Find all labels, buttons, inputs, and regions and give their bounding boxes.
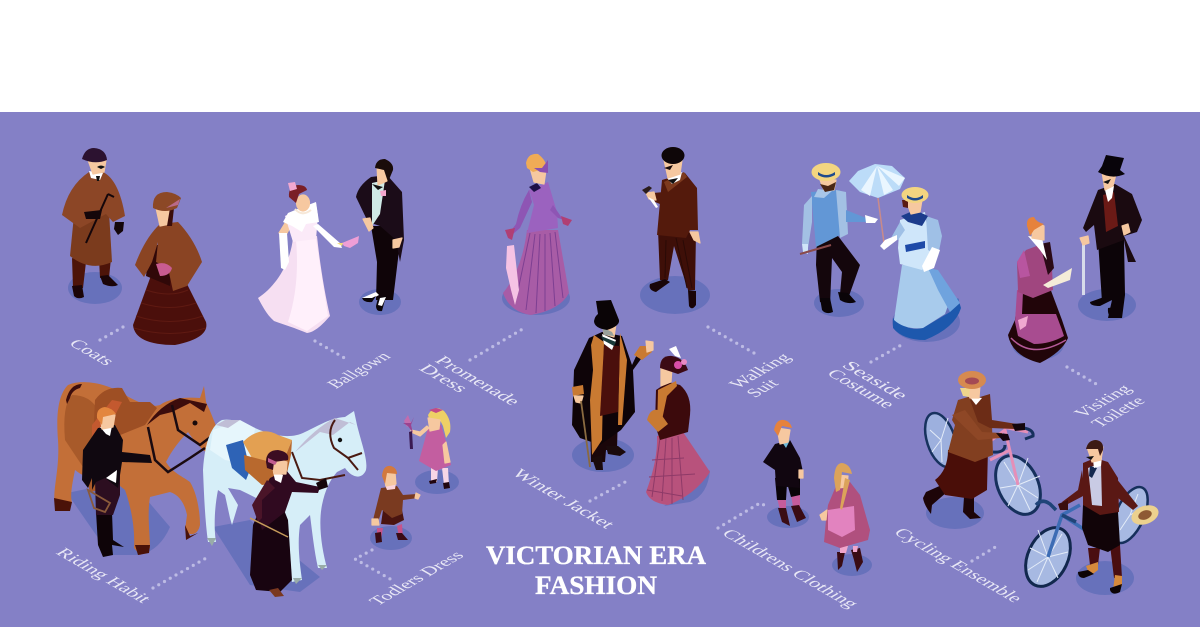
- label: walking: Walking: [724, 350, 795, 391]
- figure: cycling woman bicycle: [919, 409, 1049, 529]
- title: VICTORIAN ERA: [486, 541, 706, 570]
- label: childrens clothing: Childrens Clothing: [718, 526, 864, 611]
- connector: childrens clothing: [718, 503, 768, 528]
- label: seaside: Seaside: [838, 358, 914, 402]
- label: ballgown: Ballgown: [322, 349, 395, 391]
- connector: winter jacket: [590, 481, 627, 501]
- connector: seaside costume: [871, 344, 903, 362]
- figure: seaside woman: [880, 187, 961, 342]
- label: cycling ensemble: Cycling Ensemble: [890, 525, 1028, 605]
- connector: todlers dress: [355, 550, 392, 580]
- connector: visiting toilette: [1067, 367, 1098, 385]
- figure: toddler girl: [403, 408, 459, 494]
- figure: visiting toilette man: [1078, 155, 1142, 321]
- connector: promenade dress: [470, 327, 526, 360]
- label: winter jacket: Winter Jacket: [508, 466, 620, 531]
- title: [486, 541, 706, 600]
- label: riding habit: Riding Habit: [52, 545, 156, 606]
- figure: cycling woman: [923, 371, 1025, 519]
- label: visiting: Visiting: [1069, 381, 1136, 420]
- label: promenade: Promenade: [431, 353, 526, 408]
- figure: childrens clothing boy: [763, 420, 809, 528]
- title: FASHION: [535, 571, 657, 600]
- figure: cycling man bicycle: [1017, 482, 1155, 595]
- figure: cycling man: [1058, 440, 1161, 594]
- figure: ballgown woman: [258, 182, 359, 333]
- connector: walking suit: [708, 327, 754, 353]
- figure: riding habit white horse: [203, 411, 366, 592]
- figure: promenade woman: [502, 154, 572, 315]
- figure: coats man: [62, 148, 125, 304]
- figure: toddler boy: [370, 466, 420, 550]
- connector: ballgown: [315, 341, 348, 360]
- figure: riding habit woman: [250, 450, 328, 597]
- label: toilette: Toilette: [1086, 393, 1150, 430]
- figure: visiting toilette woman: [1008, 217, 1072, 363]
- figure: walking suit man: [640, 147, 710, 314]
- figure: seaside man: [800, 163, 878, 317]
- label: costume: Costume: [823, 366, 901, 411]
- figure: ballgown man: [356, 159, 404, 315]
- figure: winter jacket woman: [646, 346, 710, 506]
- label: dress: Dress: [415, 361, 474, 395]
- label: todlers dress: Todlers Dress: [364, 548, 468, 608]
- figure: riding habit man: [82, 407, 152, 557]
- figure: winter jacket man: [572, 300, 653, 472]
- connector: coats: [100, 327, 123, 340]
- label: suit: Suit: [741, 376, 783, 400]
- figure: riding habit brown horse: [54, 382, 221, 555]
- connector: riding habit: [153, 557, 208, 588]
- figure: coats woman: [133, 192, 206, 345]
- connector: cycling ensemble: [972, 546, 997, 561]
- label: coats: Coats: [65, 336, 120, 368]
- figure: childrens clothing girl: [820, 463, 872, 576]
- figure: parasol: [849, 164, 905, 243]
